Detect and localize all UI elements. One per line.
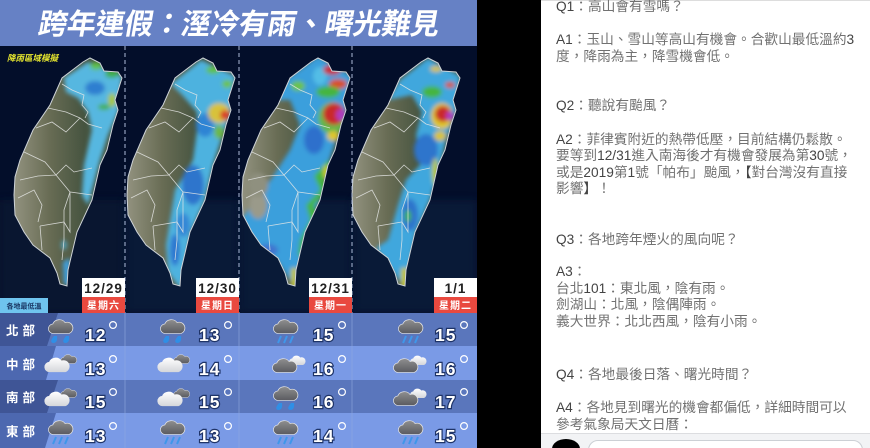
text block: A4: A4：各地見到曙光的機會都偏低，詳細時間可以: [556, 400, 847, 415]
icon: rain south 12/31: [273, 387, 298, 410]
legend caption: 降雨區域模擬: [7, 53, 60, 63]
icon: cloudy central 12/29: [44, 355, 77, 372]
date tag: 12/31: [309, 278, 352, 313]
temperatures: 16: [313, 359, 334, 379]
icon: rain north 12/30: [160, 320, 185, 343]
text block: A2: 影響】！: [556, 181, 611, 196]
icon: rain east 12/30: [160, 421, 185, 444]
temperatures: 17: [435, 392, 456, 412]
text block: A2: A2：菲律賓附近的熱帶低壓，目前結構仍鬆散。: [556, 132, 847, 147]
map panel: 12/31: [240, 56, 352, 290]
infographic: New Year holiday forecast: [0, 0, 477, 448]
degree marks: [110, 322, 467, 429]
icon: cloudy south 1/1: [393, 389, 427, 405]
temperatures: 15: [435, 325, 456, 345]
temperatures: 15: [313, 325, 334, 345]
row label: south: [0, 380, 58, 413]
row label: east: [0, 413, 56, 448]
temperatures: 13: [85, 359, 106, 379]
date tag: 1/1: 1/1: [445, 281, 466, 296]
panel: Q&A post: [541, 0, 870, 448]
text block: Q3: Q3：各地跨年煙火的風向呢？: [556, 232, 739, 247]
date tag: 1/1: 星期二: [439, 299, 472, 312]
icon: rain east 12/29: [48, 421, 73, 444]
icon: rain east 1/1: [398, 421, 423, 444]
icon: cloudy south 12/30: [157, 389, 190, 406]
text block: Q4: Q4：各地最後日落、曙光時間？: [556, 367, 752, 382]
text block: A2: [556, 132, 852, 196]
temperatures: [85, 325, 456, 446]
icon: cloudy central 12/31: [272, 356, 306, 372]
temperatures: 15: [199, 392, 220, 412]
text block: A1: A1：玉山、雪山等高山有機會。合歡山最低溫約3: [556, 32, 854, 47]
comment bar: [541, 433, 870, 448]
icon: rain north 12/31: [273, 320, 298, 343]
temperatures: 12: [85, 325, 106, 345]
date tag: 12/29: [82, 278, 125, 313]
text block: A1: [556, 32, 854, 64]
temperatures: 13: [199, 325, 220, 345]
icon: cloudy central 1/1: [393, 356, 427, 372]
date tag: 12/31: 12/31: [311, 281, 350, 296]
temperatures: 14: [313, 426, 334, 446]
text block: A3: 劍湖山：北風，陰偶陣雨。: [556, 297, 720, 312]
row label: central: [0, 346, 56, 380]
temperatures: 13: [199, 426, 220, 446]
title: 跨年連假：溼冷有雨、曙光難見: [36, 8, 443, 41]
text block: A3: 台北101：東北風，陰有雨。: [556, 281, 729, 296]
top edge: [541, 0, 870, 1]
map panel: 12/30: [127, 58, 235, 290]
temperatures: 15: [85, 392, 106, 412]
row label: central: 中部: [6, 357, 39, 372]
legend tag: lowest temperature: 各地最低溫: [6, 302, 42, 310]
row label: east: 東部: [6, 424, 39, 439]
header bar: [0, 0, 477, 46]
comment input: [588, 440, 863, 448]
temperatures: 16: [435, 359, 456, 379]
text block: A2: 或是2019第1號「帕布」颱風，【對台灣沒有直接: [556, 165, 847, 180]
temperatures: 16: [313, 392, 334, 412]
date tag: 12/30: 12/30: [198, 281, 237, 296]
row label: north: 北部: [6, 323, 39, 338]
date tag: 12/30: 星期日: [201, 299, 234, 312]
temperature table: [0, 313, 477, 448]
temperatures: 15: [435, 426, 456, 446]
date tag: 12/30: [196, 278, 239, 313]
icon: cloudy central 12/30: [157, 355, 190, 372]
temperatures: 14: [199, 359, 220, 379]
text block: Q2: Q2：聽說有颱風？: [556, 98, 670, 113]
map panel: 12/29: [14, 58, 122, 286]
date tag: 12/31: 星期一: [314, 299, 347, 312]
temperatures: 13: [85, 426, 106, 446]
text block: A3: A3：: [556, 264, 586, 279]
icon: cloudy south 12/29: [44, 389, 77, 406]
text block: A4: 參考氣象局天文日曆：: [556, 417, 693, 432]
row label: south: 南部: [6, 390, 39, 405]
row label: north: [0, 313, 58, 346]
date tag: 12/29: 星期六: [87, 299, 120, 312]
text block: A4: [556, 400, 847, 432]
text block: A3: [556, 264, 761, 329]
icon: rain north 1/1: [398, 320, 423, 343]
background: [0, 46, 477, 313]
text block: A3: 義大世界：北北西風，陰有小雨。: [556, 314, 761, 329]
icon: rain north 12/29: [48, 320, 73, 343]
legend tag: lowest temperature: [0, 298, 48, 313]
panel dividers: [125, 46, 352, 313]
sea texture: [0, 200, 477, 313]
avatar: [552, 439, 580, 448]
date tag: 12/29: 12/29: [84, 281, 123, 296]
text block: A1: 度，降雨為主，降雪機會低。: [556, 49, 734, 64]
icon: rain east 12/31: [273, 421, 298, 444]
text block: A2: 要等到12/31進入南海後才有機會發展為第30號，: [556, 148, 852, 163]
date tag: 1/1: [434, 278, 477, 313]
map panel: 1/1: [352, 58, 460, 290]
